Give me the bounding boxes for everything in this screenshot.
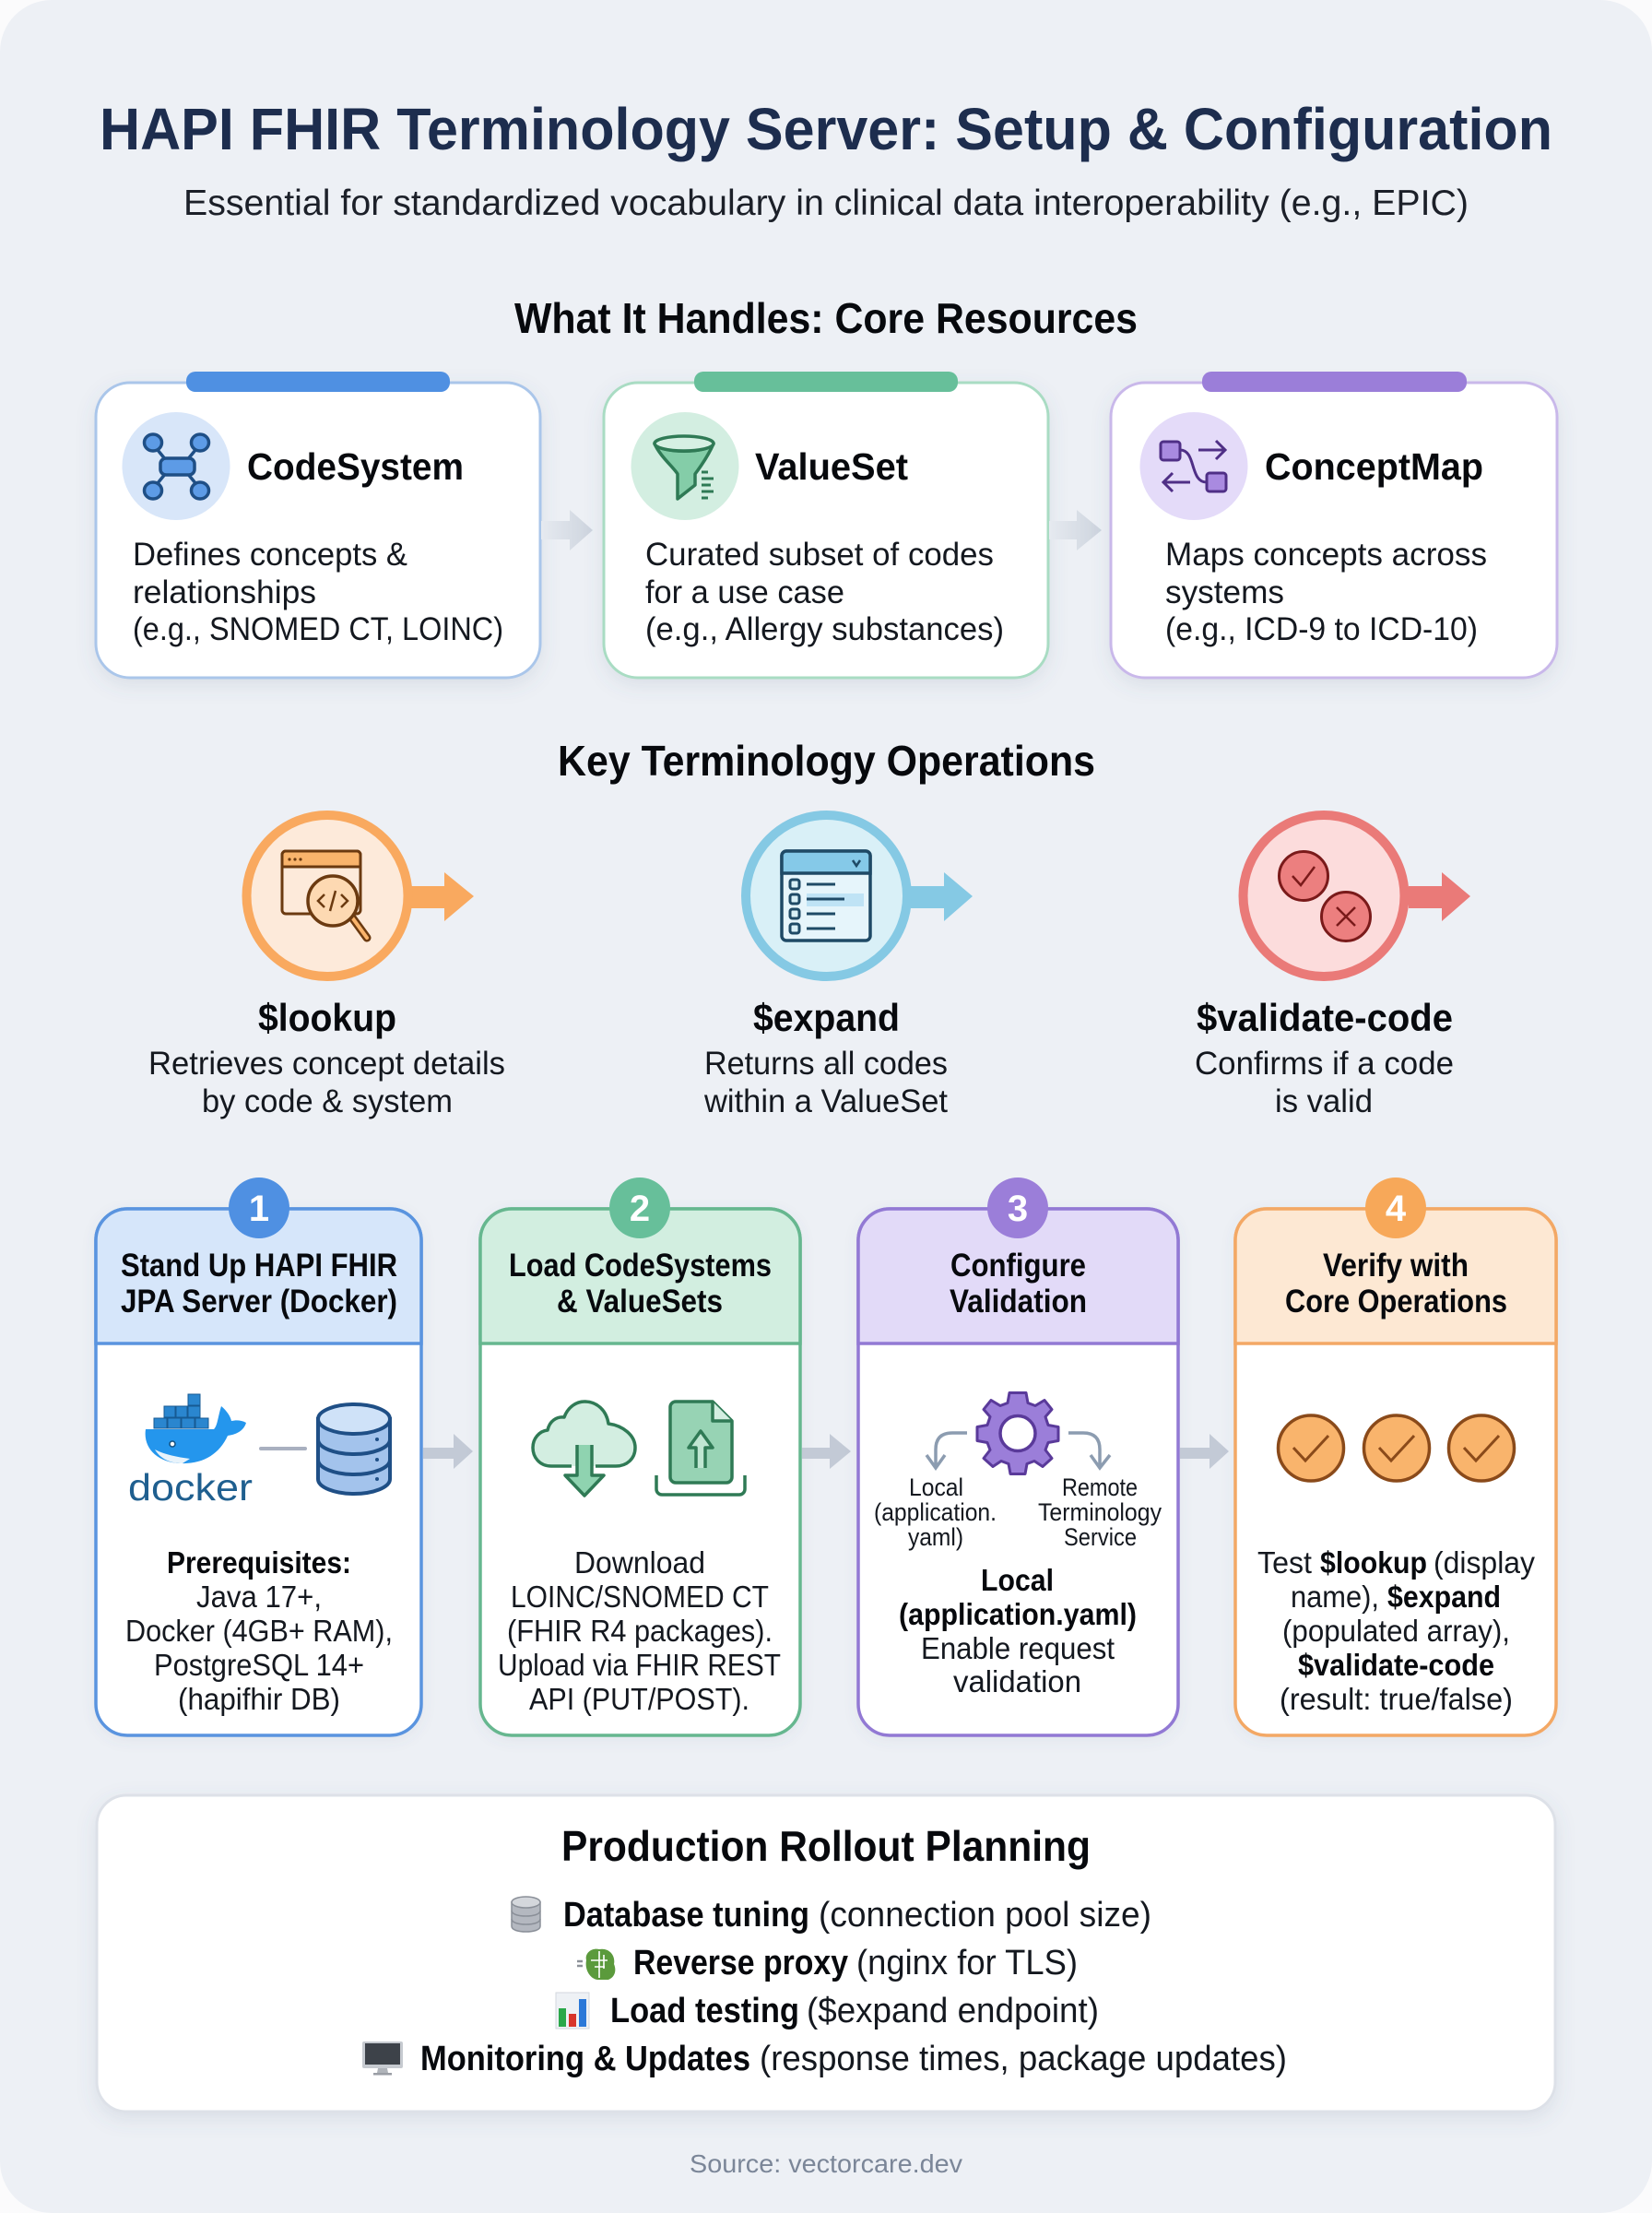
label: local: (application. <box>874 1498 997 1526</box>
step 1 header: Stand Up HAPI FHIR <box>121 1248 397 1284</box>
panel: ValueSet <box>604 372 1048 678</box>
card text: ValueSet: Curated subset of codes <box>645 537 994 573</box>
card title: ConceptMap: ConceptMap <box>1265 445 1483 488</box>
operation: lookup <box>148 815 505 1119</box>
operation text: validate-code: Confirms if a code <box>1195 1046 1454 1082</box>
operation: validate-code <box>1195 815 1470 1119</box>
icon: ValueSet funnel <box>631 412 739 520</box>
step badge 2 <box>609 1178 670 1238</box>
step 3 header: Configure <box>950 1248 1086 1284</box>
arrow: validate-code <box>1409 872 1470 921</box>
label: remote <box>1038 1473 1162 1551</box>
connector line <box>261 1447 305 1450</box>
card title: CodeSystem: CodeSystem <box>247 445 464 488</box>
step 4 panel <box>1235 1178 1556 1735</box>
operation text: lookup <box>148 1046 505 1119</box>
item: monitoring and updates: Monitoring & Updates <box>420 2040 750 2078</box>
operation text: validate-code: is valid <box>1275 1083 1373 1119</box>
step 2 text: Download <box>574 1545 705 1580</box>
item: load testing: Load testing <box>610 1992 799 2030</box>
icon: validate circle <box>1243 815 1405 976</box>
step 2 header: Load CodeSystems <box>509 1248 772 1284</box>
card text: CodeSystem <box>133 537 503 647</box>
step 1 text: Java 17+, <box>196 1580 322 1614</box>
step 4 text: (populated array), <box>1282 1614 1510 1648</box>
operation text: expand <box>703 1046 948 1119</box>
icon: docker logo <box>128 1394 253 1509</box>
heading: terminology operations: Key Terminology Operations <box>558 737 1095 785</box>
step 1 text: PostgreSQL 14+ <box>154 1648 364 1682</box>
card text: CodeSystem: Defines concepts & <box>133 537 407 573</box>
step badge 4 <box>1365 1178 1426 1238</box>
icon: ConceptMap mapping <box>1139 412 1248 520</box>
operation text: validate-code <box>1195 1046 1454 1119</box>
step 3 text: (application.yaml) <box>899 1597 1137 1631</box>
card text: ValueSet: for a use case <box>645 574 844 610</box>
panel: CodeSystem <box>96 372 540 678</box>
step 2 text: Upload via FHIR REST <box>498 1648 781 1682</box>
card text: CodeSystem: relationships <box>133 574 316 610</box>
operation: expand <box>703 815 973 1119</box>
step 3 header <box>950 1248 1087 1320</box>
arrow: to local <box>926 1433 967 1468</box>
card text: ConceptMap: Maps concepts across <box>1165 537 1487 573</box>
step badge 3 <box>987 1178 1048 1238</box>
card text: CodeSystem: (e.g., SNOMED CT, LOINC) <box>133 611 503 647</box>
item: reverse proxy: Reverse proxy <box>633 1944 848 1982</box>
step 1 panel <box>96 1178 421 1735</box>
label: remote: Service <box>1064 1523 1137 1551</box>
step 2 text: (FHIR R4 packages). <box>507 1614 773 1648</box>
card title: ValueSet: ValueSet <box>755 445 908 488</box>
item: database tuning: (connection pool size) <box>819 1896 1151 1935</box>
operation name: validate-code: $validate-code <box>1197 996 1453 1039</box>
label: local <box>874 1473 997 1551</box>
item: load testing: ($expand endpoint) <box>807 1992 1099 2030</box>
icon: database small <box>512 1897 540 1932</box>
title: HAPI FHIR Terminology Server: Setup & Configuration <box>100 96 1552 162</box>
operation text: lookup: by code & system <box>202 1083 453 1119</box>
arrow: step 1 to 2 <box>423 1434 473 1469</box>
operation name: lookup: $lookup <box>258 996 396 1039</box>
step 2 text <box>498 1545 781 1716</box>
step 4 header: Core Operations <box>1285 1284 1507 1320</box>
step badge 3: 3 <box>1008 1189 1028 1229</box>
heading: core resources: What It Handles: Core Resources <box>514 294 1138 342</box>
icon: gear <box>977 1392 1058 1473</box>
card text: ConceptMap: (e.g., ICD-9 to ICD-10) <box>1165 611 1478 647</box>
card text: ConceptMap: systems <box>1165 574 1284 610</box>
item: monitoring and updates <box>362 2040 1287 2078</box>
step 1 text: Prerequisites: <box>167 1545 351 1580</box>
step 1 text: (hapifhir DB) <box>178 1682 340 1716</box>
step badge 1: 1 <box>249 1189 269 1229</box>
step 4 text: (display <box>1434 1545 1535 1580</box>
step 3 panel <box>858 1178 1178 1735</box>
step 4 header <box>1285 1248 1507 1320</box>
step 1 text: Docker (4GB+ RAM), <box>125 1614 393 1648</box>
step 4 text: name), <box>1291 1580 1379 1614</box>
arrow: lookup <box>411 872 474 921</box>
step 1 header: JPA Server (Docker) <box>121 1284 397 1320</box>
item: monitoring and updates: (response times, package updates) <box>760 2040 1287 2078</box>
icon: lookup circle <box>247 815 407 976</box>
step 2 header: & ValueSets <box>557 1284 723 1320</box>
label: local: Local <box>909 1473 963 1501</box>
step 4 header: Verify with <box>1323 1248 1469 1284</box>
operation text: lookup: Retrieves concept details <box>148 1046 505 1082</box>
icon: proxy <box>577 1949 615 1980</box>
step 1 header <box>121 1248 397 1320</box>
step 4 text: $expand <box>1387 1580 1501 1614</box>
label: remote: Terminology <box>1038 1498 1162 1526</box>
icon: bar chart <box>556 1993 589 2029</box>
card text: ConceptMap <box>1165 537 1487 647</box>
step badge 4: 4 <box>1386 1189 1407 1229</box>
step 4 text: $validate-code <box>1298 1648 1494 1682</box>
arrow: step 3 to 4 <box>1180 1434 1229 1469</box>
panel: ConceptMap <box>1111 372 1557 678</box>
step 2 panel <box>480 1178 800 1735</box>
icon: expand circle <box>746 815 907 976</box>
step 3 text <box>899 1563 1137 1698</box>
icon: cloud download <box>533 1402 635 1496</box>
step 4 text: Test <box>1257 1545 1312 1580</box>
step 3 text: Enable request <box>921 1631 1115 1665</box>
arrow: step 2 to 3 <box>802 1434 851 1469</box>
source footer: Source: vectorcare.dev <box>690 2149 962 2178</box>
panel heading: Production Rollout Planning <box>561 1822 1091 1870</box>
label: remote: Remote <box>1062 1473 1138 1501</box>
step badge 2: 2 <box>630 1189 650 1229</box>
step 2 header <box>509 1248 772 1320</box>
card text: ValueSet: (e.g., Allergy substances) <box>645 611 1004 647</box>
icon: three checks <box>1278 1415 1514 1481</box>
step 3 text: validation <box>953 1664 1081 1698</box>
arrow: ValueSet to ConceptMap <box>1049 510 1102 550</box>
step 2 text: LOINC/SNOMED CT <box>511 1580 769 1614</box>
card text: ValueSet <box>645 537 1004 647</box>
step 3 header: Validation <box>950 1284 1087 1320</box>
arrow: CodeSystem to ValueSet <box>541 510 593 550</box>
icon: database <box>318 1404 390 1494</box>
item: database tuning: Database tuning <box>563 1896 809 1935</box>
icon: docker logo: docker <box>128 1466 253 1509</box>
operation text: expand: within a ValueSet <box>703 1083 948 1119</box>
step badge 1 <box>229 1178 289 1238</box>
panel: production rollout planning <box>97 1795 1555 2112</box>
step 4 text <box>1257 1545 1535 1716</box>
step 3 text: Local <box>981 1563 1054 1597</box>
arrow: to remote <box>1068 1433 1110 1468</box>
step 2 text: API (PUT/POST). <box>529 1682 749 1716</box>
item: reverse proxy: (nginx for TLS) <box>856 1944 1078 1982</box>
icon: CodeSystem network <box>122 412 230 520</box>
item: reverse proxy <box>577 1944 1078 1982</box>
operation text: expand: Returns all codes <box>704 1046 948 1082</box>
label: local: yaml) <box>908 1523 963 1551</box>
step 1 text <box>125 1545 393 1716</box>
item: load testing <box>556 1992 1099 2030</box>
icon: monitor <box>362 2041 403 2075</box>
step 4 text: (result: true/false) <box>1280 1682 1513 1716</box>
item: database tuning <box>512 1896 1151 1935</box>
arrow: expand <box>911 872 973 921</box>
icon: file upload <box>656 1402 745 1495</box>
step 4 text: $lookup <box>1320 1545 1427 1580</box>
operation name: expand: $expand <box>753 996 900 1039</box>
subtitle: Essential for standardized vocabulary in clinical data interoperability (e.g., EPIC) <box>183 183 1469 223</box>
